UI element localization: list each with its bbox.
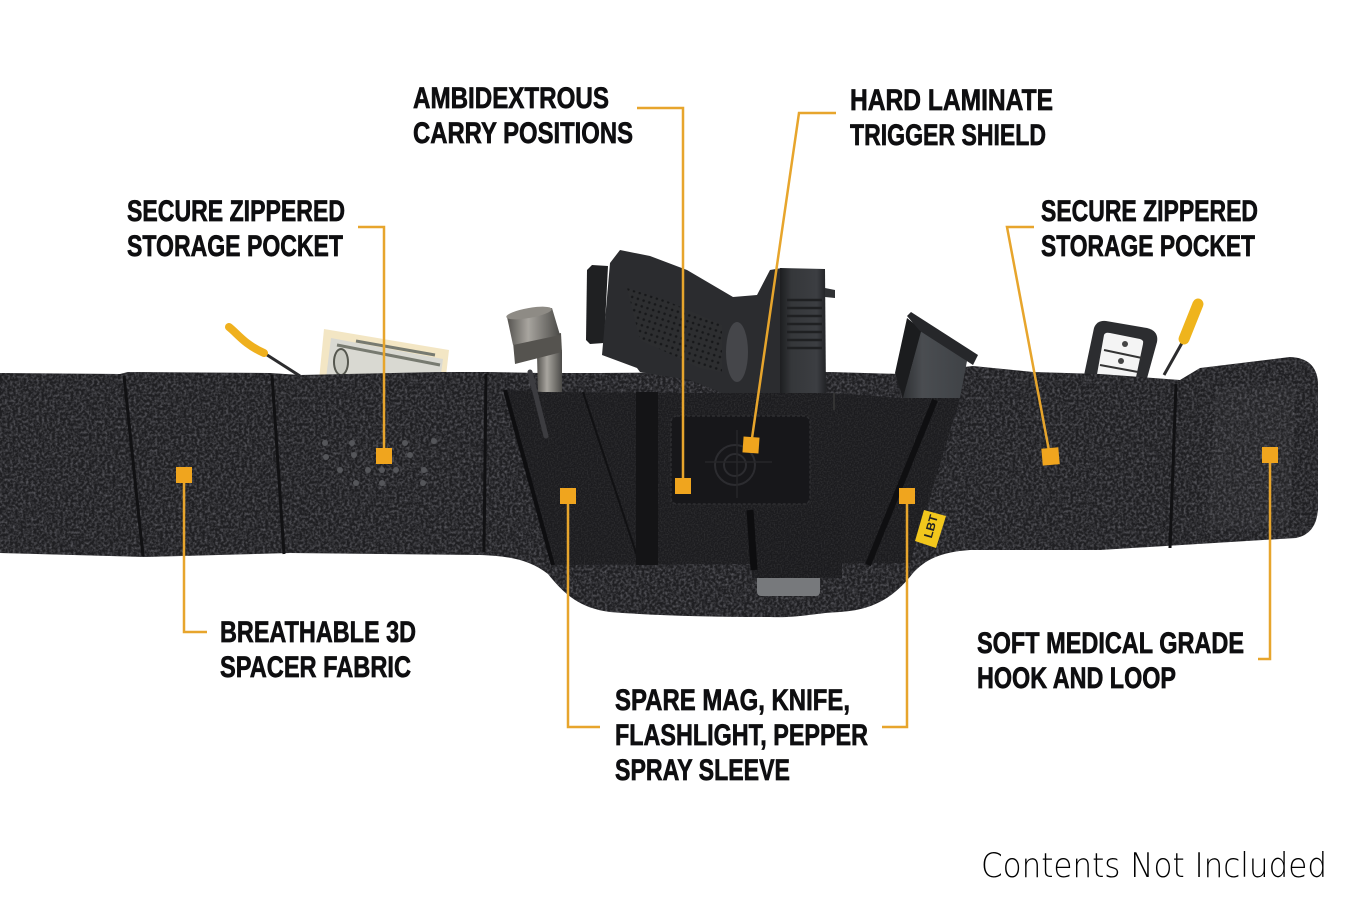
trigger shield patch	[671, 416, 810, 504]
icon: zipper pull right	[1164, 304, 1198, 375]
yellow brand tag: LBT	[921, 513, 941, 540]
icon: car key fob	[1083, 321, 1157, 382]
seams	[124, 374, 1176, 556]
icon: cash bills	[319, 329, 449, 380]
callout: hard laminate trigger shield	[742, 84, 1053, 454]
belt body	[0, 357, 1318, 617]
hook and loop end tab	[1206, 384, 1296, 530]
icon: zipper pull left	[229, 327, 300, 376]
muzzle sleeve and gun muzzle	[750, 510, 842, 596]
callout: breathable 3D spacer fabric	[176, 467, 416, 684]
callout: soft medical grade hook and loop: SOFT MEDICAL GRADE	[977, 627, 1244, 660]
yellow brand tag	[915, 510, 946, 548]
callout: spare mag, knife, flashlight, pepper spray sleeve: SPARE MAG, KNIFE,	[615, 684, 850, 717]
icon: flashlight	[505, 304, 562, 395]
callout: breathable 3D spacer fabric: BREATHABLE 3D	[220, 616, 416, 649]
footnote: contents not included: Contents Not Included	[981, 846, 1327, 886]
callout: left secure zippered storage pocket: STORAGE POCKET	[127, 230, 343, 263]
callout: soft medical grade hook and loop	[977, 447, 1278, 695]
callout: spare mag, knife, flashlight, pepper spray sleeve	[560, 488, 915, 787]
callout: hard laminate trigger shield: TRIGGER SHIELD	[850, 119, 1046, 152]
callout: left secure zippered storage pocket: SECURE ZIPPERED	[127, 195, 345, 228]
callout: right secure zippered storage pocket: SECURE ZIPPERED	[1041, 195, 1258, 228]
elastic holster panel	[505, 372, 960, 565]
callout: soft medical grade hook and loop: HOOK AND LOOP	[977, 662, 1176, 695]
callout: spare mag, knife, flashlight, pepper spray sleeve: SPRAY SLEEVE	[615, 754, 790, 787]
callout: ambidextrous carry positions: AMBIDEXTROUS	[413, 82, 609, 115]
callout: left secure zippered storage pocket	[127, 195, 392, 464]
items behind the belt edge	[229, 304, 1198, 382]
callout: hard laminate trigger shield: HARD LAMINATE	[850, 84, 1053, 117]
flashlight clip	[530, 372, 546, 436]
icon: handgun	[586, 250, 835, 396]
mesh dots	[322, 438, 437, 486]
callout: ambidextrous carry positions	[413, 82, 691, 494]
callout: breathable 3D spacer fabric: SPACER FABRIC	[220, 651, 411, 684]
callout: ambidextrous carry positions: CARRY POSITIONS	[413, 117, 633, 150]
callout: spare mag, knife, flashlight, pepper spray sleeve: FLASHLIGHT, PEPPER	[615, 719, 868, 752]
callout: right secure zippered storage pocket: STORAGE POCKET	[1041, 230, 1255, 263]
belly band belt	[0, 357, 1318, 617]
callout: right secure zippered storage pocket	[1007, 195, 1258, 466]
icon: spare magazine	[895, 312, 978, 398]
